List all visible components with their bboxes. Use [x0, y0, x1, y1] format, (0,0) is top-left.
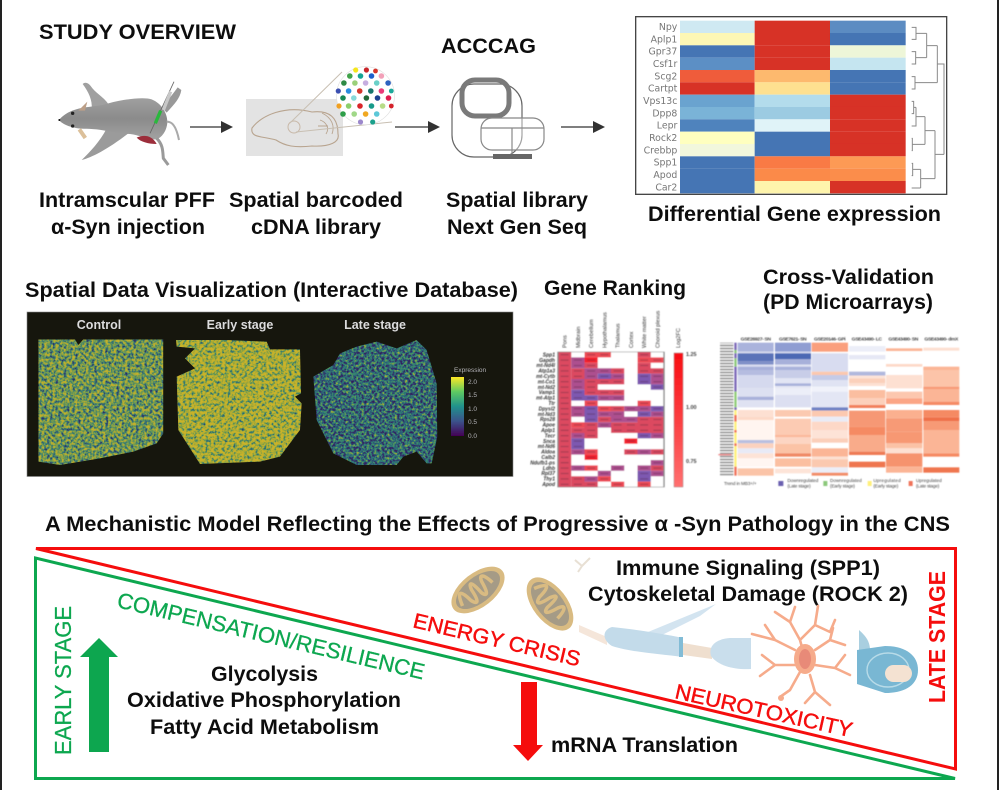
color bar: 1.25 [686, 352, 696, 358]
legend: trend categories: Downregulated [830, 478, 862, 483]
dataset headers: GSE20146- GPi [814, 336, 846, 342]
color bar: 1.00 [686, 405, 696, 411]
dataset headers: GSE7621- SN [779, 336, 807, 342]
tissue map: late stage [313, 339, 438, 465]
dataset headers: GSE26927- SN [741, 336, 771, 342]
heading: cross-validation [763, 265, 934, 314]
chart: differential expression heatmap: Car2 [655, 182, 677, 193]
heading: cross-validation: (PD Microarrays) [763, 290, 933, 314]
icon: faint dendrite fragment [575, 558, 590, 572]
icon: mitochondrion left [443, 558, 513, 622]
legend: trend categories [724, 478, 942, 488]
chart: differential expression heatmap: Crebbp [644, 145, 677, 156]
gene row labels: Gapdh [539, 358, 555, 364]
caption: library step [229, 188, 403, 239]
chart: differential expression heatmap [636, 17, 947, 194]
legend: trend categories: Upregulated [916, 478, 942, 483]
text: mRNA translation: mRNA Translation [551, 733, 738, 757]
heading: spatial data visualization: Spatial Data Visualization (Interactive Database) [25, 278, 518, 302]
heading: mechanistic model: A Mechanistic Model Reflecting the Effects of Progressive α -Syn Pathology in the CNS [45, 513, 950, 536]
column GSE20146 [812, 343, 848, 476]
text: upregulated pathways: Oxidative Phosphorylation [127, 688, 401, 712]
chart: differential expression heatmap: Rock2 [649, 133, 677, 144]
panel labels: Control [77, 318, 121, 332]
triangle: early stage [36, 558, 955, 778]
chart: differential expression heatmap: Lepr [657, 121, 677, 132]
chart: differential expression heatmap: Vps13c [643, 96, 677, 107]
dataset headers: GSE43490- SN [888, 336, 919, 342]
gene row labels: mt-Nd3 [538, 412, 555, 418]
label: energy crisis: ENERGY CRISIS [411, 609, 583, 671]
region column labels: Cortex [629, 331, 635, 348]
legend: trend categories: (Early stage) [873, 483, 899, 488]
annotation sidebar [734, 343, 737, 476]
arrow: mouse to library [190, 121, 233, 133]
caption: injection step: α-Syn injection [51, 215, 205, 239]
panel labels [77, 318, 406, 332]
gene row labels: mt-Cytb [536, 374, 555, 380]
column GSE7621 [775, 343, 811, 473]
dataset headers [741, 336, 959, 342]
text: late stage pathways: Cytoskeletal Damage (ROCK 2) [588, 582, 908, 606]
label: neurotoxicity: NEUROTOXICITY [673, 680, 855, 742]
caption: sequencing step [446, 188, 588, 239]
dataset headers: GSE43490- dmX [924, 336, 959, 342]
gene row labels: Thy1 [543, 477, 555, 483]
heading: gene ranking: Gene Ranking [544, 276, 686, 300]
icon: sequencer [452, 80, 544, 159]
icon: brain section with barcoded dots [246, 67, 394, 156]
gene row labels: mt-Co1 [538, 379, 555, 385]
chart: PD microarray cross-validation heatmap [718, 336, 959, 488]
heading: study overview: STUDY OVERVIEW [39, 20, 237, 44]
caption: library step: cDNA library [251, 215, 381, 239]
legend: expression scale [451, 367, 487, 440]
gene row labels: Spp1 [543, 352, 555, 358]
legend: expression scale: 0.0 [468, 433, 477, 440]
text: upregulated pathways: Glycolysis [211, 662, 318, 686]
gene row labels, illegible strip [720, 343, 733, 476]
chart: differential expression heatmap: Scg2 [654, 71, 677, 82]
label: barcode sequence: ACCCAG [441, 34, 536, 58]
column GSE43490 SN [886, 348, 922, 473]
frame: right rule [997, 0, 999, 790]
legend: trend categories: Downregulated [787, 478, 819, 483]
chart: differential expression heatmap: Aplp1 [651, 34, 677, 45]
triangle: late stage [36, 548, 956, 769]
region column labels [563, 310, 682, 348]
chart: differential expression heatmap: Spp1 [654, 158, 677, 169]
gene row labels: mt-Nd4l [536, 363, 556, 369]
panel: spatial expression maps [27, 312, 513, 476]
chart: differential expression heatmap: Cartpt [648, 84, 678, 95]
column GSE43490 dmX [923, 348, 959, 473]
region column labels: Thalamus [616, 323, 622, 348]
legend: trend categories: Trend in MB3+/+ [724, 481, 757, 486]
gene row labels: Rps28 [540, 417, 555, 423]
arrow: library to sequencer [395, 121, 440, 133]
gene row labels: Ttr [548, 401, 556, 407]
gene row labels: mt-Atp1 [536, 396, 555, 402]
legend: trend categories: Upregulated [873, 478, 901, 483]
heading: cross-validation: Cross-Validation [763, 265, 934, 289]
gene row labels [530, 352, 556, 488]
legend: expression scale: 0.5 [468, 419, 477, 426]
gene row labels: Vamp1 [539, 390, 555, 396]
legend: expression scale: Expression [454, 367, 487, 374]
caption: injection step [39, 188, 215, 239]
column GSE43490 LC [849, 346, 885, 467]
barcoded spot circle [336, 67, 394, 125]
panel labels: Early stage [207, 318, 273, 332]
gene row labels: Dpysl2 [539, 406, 555, 412]
caption: differential gene expression: Differential Gene expression [648, 202, 941, 226]
icon: mitochondrion right [518, 569, 582, 639]
chart: differential expression heatmap: Npy [659, 22, 678, 33]
panel labels: Late stage [344, 318, 406, 332]
chart: differential expression heatmap: Csf1r [653, 59, 677, 70]
icon: myelinated axon [579, 604, 751, 669]
region column labels: Cerebellum [589, 319, 595, 348]
icon: astrocyte neuron [752, 606, 850, 705]
region column labels: Log2FC [676, 328, 682, 348]
icon: mouse with injection [58, 82, 181, 165]
cell value marks [558, 355, 664, 484]
chart: differential expression heatmap: Gpr37 [648, 47, 677, 58]
gene row labels: Ndufb1-ps [530, 460, 555, 466]
label: late stage: LATE STAGE [924, 571, 950, 703]
gene row labels: Calb2 [541, 455, 555, 461]
caption: sequencing step: Spatial library [446, 188, 588, 212]
region column labels: White matter [642, 316, 648, 348]
tissue map: control [38, 339, 163, 465]
arrow: upregulated [80, 638, 118, 752]
text: upregulated pathways: Fatty Acid Metabolism [150, 715, 379, 739]
frame: left rule [0, 0, 2, 790]
arrow: sequencer to heatmap [561, 121, 605, 133]
icon: myelin cross-section [857, 630, 918, 693]
legend: expression scale: 1.0 [468, 406, 477, 413]
legend: expression scale: 1.5 [468, 392, 477, 399]
text: late stage pathways [588, 556, 908, 606]
caption: library step: Spatial barcoded [229, 188, 403, 212]
heatmap cells [558, 352, 664, 487]
color bar: 0.75 [686, 459, 696, 465]
tissue map: early stage [176, 339, 302, 465]
gene row labels: Aplp1 [540, 428, 555, 434]
gene row labels: Apod [541, 482, 556, 488]
legend: expression scale: 2.0 [468, 379, 477, 386]
label: early stage: EARLY STAGE [50, 606, 76, 755]
region column labels: Choroid plexus [655, 310, 661, 348]
chart: differential expression heatmap: Dpp8 [652, 108, 677, 119]
gene row labels: mt-Nd2 [538, 385, 555, 391]
text: upregulated pathways [127, 662, 401, 739]
text: late stage pathways: Immune Signaling (SPP1) [616, 556, 880, 580]
gene row labels: Apoe [542, 423, 555, 429]
chart: differential expression heatmap: Apod [653, 170, 677, 181]
caption: injection step: Intramscular PFF [39, 188, 215, 212]
region column labels: Hypothalamus [602, 312, 608, 348]
caption: sequencing step: Next Gen Seq [447, 215, 587, 239]
legend: trend categories: (Late stage) [787, 483, 811, 488]
arrow: downregulated [513, 682, 543, 761]
gene row labels: Rpl37 [541, 471, 555, 477]
gene row labels: Atp1a3 [537, 369, 555, 375]
color bar [674, 352, 696, 487]
chart: gene ranking heatmap [530, 310, 696, 488]
label: compensation resilience: COMPENSATION/RESILIENCE [115, 588, 427, 684]
legend: trend categories: (Early stage) [830, 483, 855, 488]
gene row labels: Tecr [545, 433, 556, 439]
gene row labels: Snca [543, 439, 555, 445]
legend: trend categories: (Late stage) [916, 483, 940, 488]
gene row labels: Aldoa [540, 450, 555, 456]
gene row labels: Ldhb [543, 466, 555, 472]
region column labels: Midbrain [576, 327, 582, 348]
dataset headers: GSE43490- LC [852, 336, 882, 342]
column GSE26927 [738, 343, 774, 476]
region column labels: Pons [563, 335, 569, 348]
gene row labels: mt-Nd6 [538, 444, 555, 450]
